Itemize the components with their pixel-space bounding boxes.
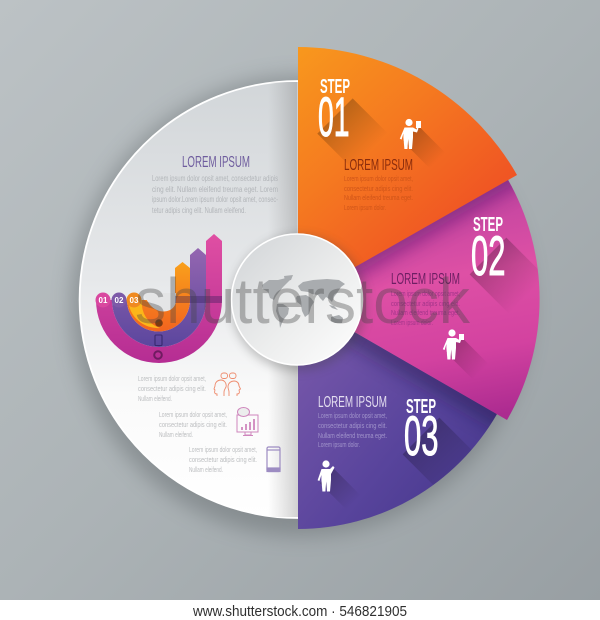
icon: person on phone — [318, 460, 361, 510]
icon: phone mini — [155, 335, 162, 346]
badge: 01: 01 — [99, 296, 108, 305]
text block: step 03: Lorem ipsum dolor. — [318, 440, 360, 449]
label: step 02: STEP — [473, 214, 503, 236]
text block: item 3: consectetur adipis cing elit. — [189, 455, 257, 464]
number shadow: step 02 — [470, 238, 538, 307]
text block: item 1: consectetur adipis cing elit. — [138, 384, 206, 393]
text block: step 03: Lorem ipsum dolor opsit amet, — [318, 411, 387, 420]
text block: item 1 — [138, 374, 206, 403]
heading: step 03: LOREM IPSUM — [318, 394, 387, 411]
icon: world map — [262, 275, 345, 328]
panel: step 03 purple segment — [298, 332, 497, 529]
number: 01: 01 — [318, 85, 350, 148]
text block: step 02: Lorem ipsum dolor. — [391, 318, 433, 327]
text block: left panel intro: cing elit. Nullam eleifend treuma eget. Lorem — [152, 185, 278, 194]
diagram shadow — [71, 76, 531, 536]
arc and arrow: orange — [127, 262, 190, 332]
text block: step 01: Lorem ipsum dolor opsit amet, — [344, 174, 413, 183]
text block: step 02: Nullam eleifend treuma eget. — [391, 308, 460, 317]
footer strip — [0, 600, 600, 620]
text block: step 02 — [391, 289, 460, 327]
inner yellow wedge — [128, 300, 160, 328]
text block: step 01: Nullam eleifend treuma eget. — [344, 193, 413, 202]
text block: step 01: Lorem ipsum dolor. — [344, 203, 386, 212]
icon: target — [154, 351, 162, 359]
panel: step 01 orange segment — [298, 47, 517, 268]
text block: item 1: Nullam eleifend. — [138, 394, 172, 403]
text block: item 2: Lorem ipsum dolor opsit amet, — [159, 410, 227, 419]
watermark: shutterstock — [135, 265, 471, 337]
heading: left panel: LOREM IPSUM — [182, 154, 250, 171]
text block: item 2: Nullam eleifend. — [159, 430, 193, 439]
heading: step 01: LOREM IPSUM — [344, 157, 413, 174]
arc and arrow: magenta — [96, 234, 222, 363]
icon: monitor with chart — [237, 408, 258, 436]
text block: step 01: consectetur adipis cing elit. — [344, 184, 413, 193]
text block: step 01 — [344, 174, 413, 212]
icon: two heads — [214, 373, 240, 396]
icon: smartphone — [267, 447, 280, 472]
number: 02: 02 — [471, 224, 506, 287]
number: 03: 03 — [404, 404, 438, 467]
text block: item 1: Lorem ipsum dolor opsit amet, — [138, 374, 206, 383]
label: step 03: STEP — [406, 396, 436, 418]
panel: left white half disc — [80, 81, 298, 518]
footer text: www.shutterstock.com · 546821905 — [192, 604, 407, 620]
icon: person with tablet — [443, 329, 489, 380]
text block: item 3 — [189, 445, 257, 474]
badge: 03: 03 — [130, 296, 139, 305]
label: step 01: STEP — [320, 76, 350, 98]
heading: step 02: LOREM IPSUM — [391, 271, 460, 288]
number shadow: step 03 — [402, 418, 471, 485]
icon: gear — [155, 319, 163, 327]
text block: step 03 — [318, 411, 387, 449]
text block: item 2: consectetur adipis cing elit. — [159, 420, 227, 429]
panel: step 02 magenta segment — [354, 180, 540, 420]
icon: person with tablet — [400, 119, 446, 169]
arc and arrow: purple — [112, 248, 206, 347]
text block: item 3: Lorem ipsum dolor opsit amet, — [189, 445, 257, 454]
text block: step 03: consectetur adipis cing elit. — [318, 421, 387, 430]
text block: left panel intro: tetur adipis cing elit. Nullam eleifend. — [152, 206, 246, 215]
text block: item 2 — [159, 410, 227, 439]
number shadow: step 01 — [318, 98, 382, 163]
text block: item 3: Nullam eleifend. — [189, 465, 223, 474]
text block: left panel intro — [152, 174, 278, 215]
text block: left panel intro: Lorem ipsum dolor opsit amet, consectetur adipis — [152, 174, 278, 183]
chart: rainbow arc with arrows — [96, 234, 222, 363]
center hub circle — [231, 234, 367, 371]
text block: step 02: Lorem ipsum dolor opsit amet, — [391, 289, 460, 298]
text block: step 02: consectetur adipis cing elit. — [391, 299, 460, 308]
inner pale tag — [142, 293, 176, 311]
text block: step 03: Nullam eleifend treuma eget. — [318, 431, 387, 440]
text block: left panel intro: ipsum dolor.Lorem ipsum dolor opsit amet, consec- — [152, 195, 278, 204]
badge: 02: 02 — [115, 296, 124, 305]
